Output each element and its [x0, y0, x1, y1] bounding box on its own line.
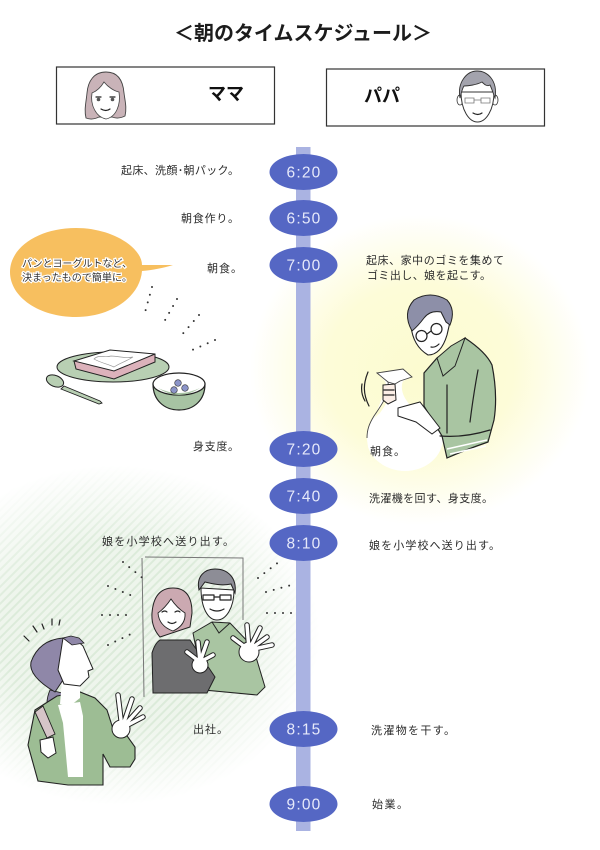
- pill 8:10: 8:10: [287, 536, 321, 552]
- papa in window: [193, 622, 265, 695]
- neck: [60, 680, 80, 706]
- panel: papa header: [326, 69, 544, 126]
- timeline bar: [296, 147, 310, 831]
- mama in window: [152, 640, 215, 693]
- pill 7:00: [270, 247, 338, 283]
- papa schedule text: 洗濯機を回す、身支度。: [369, 491, 493, 505]
- pill 7:20: [270, 431, 338, 467]
- spoon: [61, 386, 102, 404]
- callout: breakfast speech bubble: [10, 228, 173, 317]
- trash bag: [368, 369, 434, 467]
- head: [411, 305, 450, 355]
- blueberries: [175, 380, 181, 386]
- plate: [57, 352, 169, 382]
- icon: mama face: [85, 72, 126, 119]
- illustration: daughter waving: [24, 619, 143, 785]
- pill 8:15: 8:15: [287, 722, 321, 738]
- pill 7:40: [270, 478, 338, 514]
- papa schedule text: 始業。: [372, 797, 408, 811]
- shirt: [424, 338, 496, 458]
- pill 8:10: [270, 525, 338, 561]
- background glow: green stripes: [0, 482, 296, 788]
- label: mama: ママ: [208, 84, 244, 104]
- pill 9:00: 9:00: [287, 796, 321, 814]
- pill 7:00: 7:00: [287, 258, 321, 274]
- shirt details: [440, 370, 490, 436]
- backpack strap and fist: [35, 706, 55, 738]
- toast: [74, 354, 155, 379]
- pill 6:50: [270, 200, 338, 236]
- dotted lines: window emphasis: [102, 561, 296, 645]
- motion lines: [362, 372, 369, 406]
- time pills: [270, 154, 338, 822]
- ponytail: [47, 690, 66, 724]
- pill 8:15: [270, 711, 338, 747]
- mama schedule text: 出社。: [193, 722, 228, 736]
- mama schedule text: 起床、洗顔･朝パック。: [121, 164, 239, 177]
- papa schedule text: [366, 253, 504, 811]
- waving hand: [112, 695, 143, 738]
- hair: [31, 638, 67, 692]
- bowl: [153, 384, 205, 410]
- pill 6:50: 6:50: [287, 210, 321, 228]
- bag glow: [367, 405, 443, 471]
- face: [58, 638, 93, 686]
- title: ＜朝のタイムスケジュール＞: [174, 22, 432, 45]
- icon: papa face: [457, 71, 498, 122]
- papa schedule text: 洗濯物を干す。: [371, 723, 455, 737]
- mama schedule text: [102, 164, 242, 736]
- reaching hand and arm: [398, 402, 440, 434]
- papa schedule text: 娘を小学校へ送り出す。: [369, 538, 500, 552]
- callout: breakfast speech bubble: 決まったもので簡単に。: [22, 271, 132, 284]
- papa waving hand: [233, 625, 272, 662]
- background glow: yellow: [250, 215, 590, 525]
- mama schedule text: 朝食作り。: [181, 212, 239, 225]
- gripping hand: [383, 384, 396, 404]
- mama schedule text: 娘を小学校へ送り出す。: [102, 534, 234, 548]
- dotted lines: breakfast emphasis: [144, 287, 215, 351]
- inner shirt: [58, 702, 83, 777]
- illustration: window frame with parents: [142, 557, 272, 697]
- pill 7:20: 7:20: [287, 442, 321, 458]
- pill 7:40: 7:40: [287, 488, 321, 506]
- mama schedule text: 身支度。: [193, 439, 239, 453]
- hair: [407, 295, 452, 331]
- pill 6:20: 6:20: [287, 164, 321, 182]
- collar: [437, 338, 465, 376]
- jacket: [28, 692, 135, 785]
- mama schedule text: 朝食。: [207, 262, 242, 275]
- callout: breakfast speech bubble: パンとヨーグルトなど、: [22, 257, 132, 270]
- pill 6:20: [270, 154, 338, 190]
- illustration: breakfast: [45, 350, 205, 410]
- surprise lines: [24, 619, 60, 641]
- label: papa: パパ: [364, 86, 400, 106]
- illustration: papa with trash bag: [362, 295, 496, 471]
- panel: mama header: [56, 67, 274, 124]
- papa schedule text: ゴミ出し、娘を起こす。: [367, 268, 491, 282]
- mama waving hand: [187, 642, 213, 673]
- glasses and mouth: [416, 324, 442, 347]
- text: papa breakfast: 朝食。: [370, 445, 405, 458]
- papa schedule text: 起床、家中のゴミを集めて: [366, 253, 504, 267]
- pill 9:00: [270, 786, 338, 822]
